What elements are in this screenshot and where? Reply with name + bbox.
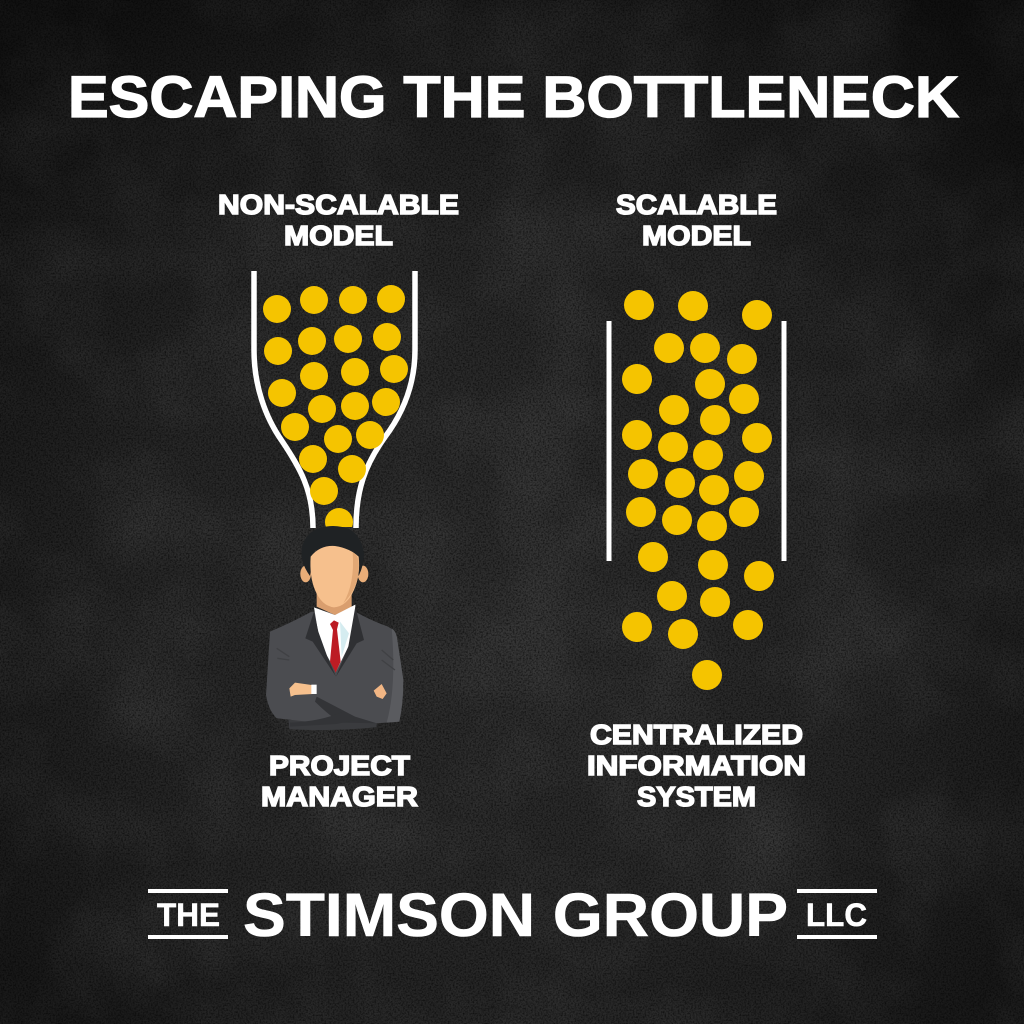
yellow dots in funnel xyxy=(263,285,408,536)
title: ESCAPING THE BOTTLENECK xyxy=(68,65,959,130)
straight pipe walls xyxy=(609,321,784,561)
yellow dots in pipe xyxy=(622,290,774,690)
logo right tag: llc: LLC xyxy=(806,897,867,933)
logo left tag: the: THE xyxy=(157,897,220,933)
logo right tag: llc xyxy=(797,889,877,939)
logo: the stimson group llc xyxy=(148,881,877,949)
heading: scalable model: SCALABLE xyxy=(616,189,777,220)
label: centralized information system xyxy=(587,719,806,812)
heading: non-scalable model xyxy=(218,189,459,251)
jacket body xyxy=(266,612,403,723)
hair xyxy=(301,526,364,576)
heading: scalable model xyxy=(616,189,777,251)
heading: scalable model: MODEL xyxy=(642,220,751,251)
logo wordmark: STIMSON GROUP xyxy=(243,881,788,949)
shirt xyxy=(314,605,355,672)
label: project manager xyxy=(261,750,418,812)
label: project manager: PROJECT xyxy=(269,750,410,781)
label: centralized information system: CENTRALIZED xyxy=(590,719,803,750)
panel: non-scalable model xyxy=(218,189,459,812)
heading: non-scalable model: MODEL xyxy=(284,220,393,251)
icon: project manager with crossed arms xyxy=(266,526,403,730)
label: centralized information system: INFORMATION xyxy=(587,750,806,781)
jacket shading xyxy=(387,628,403,723)
bottleneck funnel outline xyxy=(254,271,415,528)
logo left tag: the xyxy=(148,889,228,939)
tie xyxy=(330,620,341,673)
heading: non-scalable model: NON-SCALABLE xyxy=(218,189,459,220)
ears xyxy=(300,566,311,582)
label: project manager: MANAGER xyxy=(261,781,418,812)
neck xyxy=(317,590,352,615)
lapels xyxy=(305,612,336,677)
hands and cuff xyxy=(289,683,313,697)
jacket hem xyxy=(288,720,377,730)
label: centralized information system: SYSTEM xyxy=(637,781,756,812)
face xyxy=(310,546,359,607)
panel: scalable model xyxy=(587,189,806,812)
